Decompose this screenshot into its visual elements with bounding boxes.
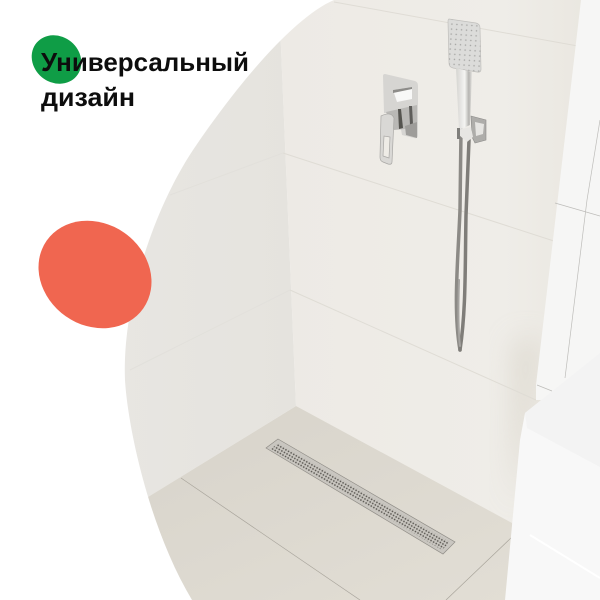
decorative coral blob xyxy=(17,199,173,350)
mixer plate xyxy=(383,74,418,138)
mixer button xyxy=(393,87,412,102)
mixer body xyxy=(386,105,417,130)
white cabinet xyxy=(505,400,600,600)
mixer lower plate xyxy=(405,122,417,138)
title: Универсальный xyxy=(41,47,249,77)
floor tile joints xyxy=(181,478,512,600)
icon: hand shower xyxy=(448,19,486,350)
icon: linear shower drain xyxy=(266,439,455,554)
floor xyxy=(148,406,512,600)
back wall xyxy=(280,0,581,524)
title: дизайн xyxy=(41,82,135,112)
hand shower head xyxy=(448,19,481,72)
column tile joints xyxy=(537,120,600,391)
cabinet top surface xyxy=(525,353,600,467)
wall holder xyxy=(457,116,486,143)
decorative green blob xyxy=(22,25,91,94)
icon: shower mixer xyxy=(380,74,418,164)
white column with tiles xyxy=(536,0,600,400)
title xyxy=(41,47,249,112)
left wall xyxy=(124,40,296,497)
wall tile joints xyxy=(284,2,576,390)
shower handle xyxy=(456,68,472,130)
shadow beside column and cabinet xyxy=(510,344,539,446)
cabinet drawer line xyxy=(530,535,600,578)
mixer handle xyxy=(380,114,394,164)
hose xyxy=(456,130,469,350)
